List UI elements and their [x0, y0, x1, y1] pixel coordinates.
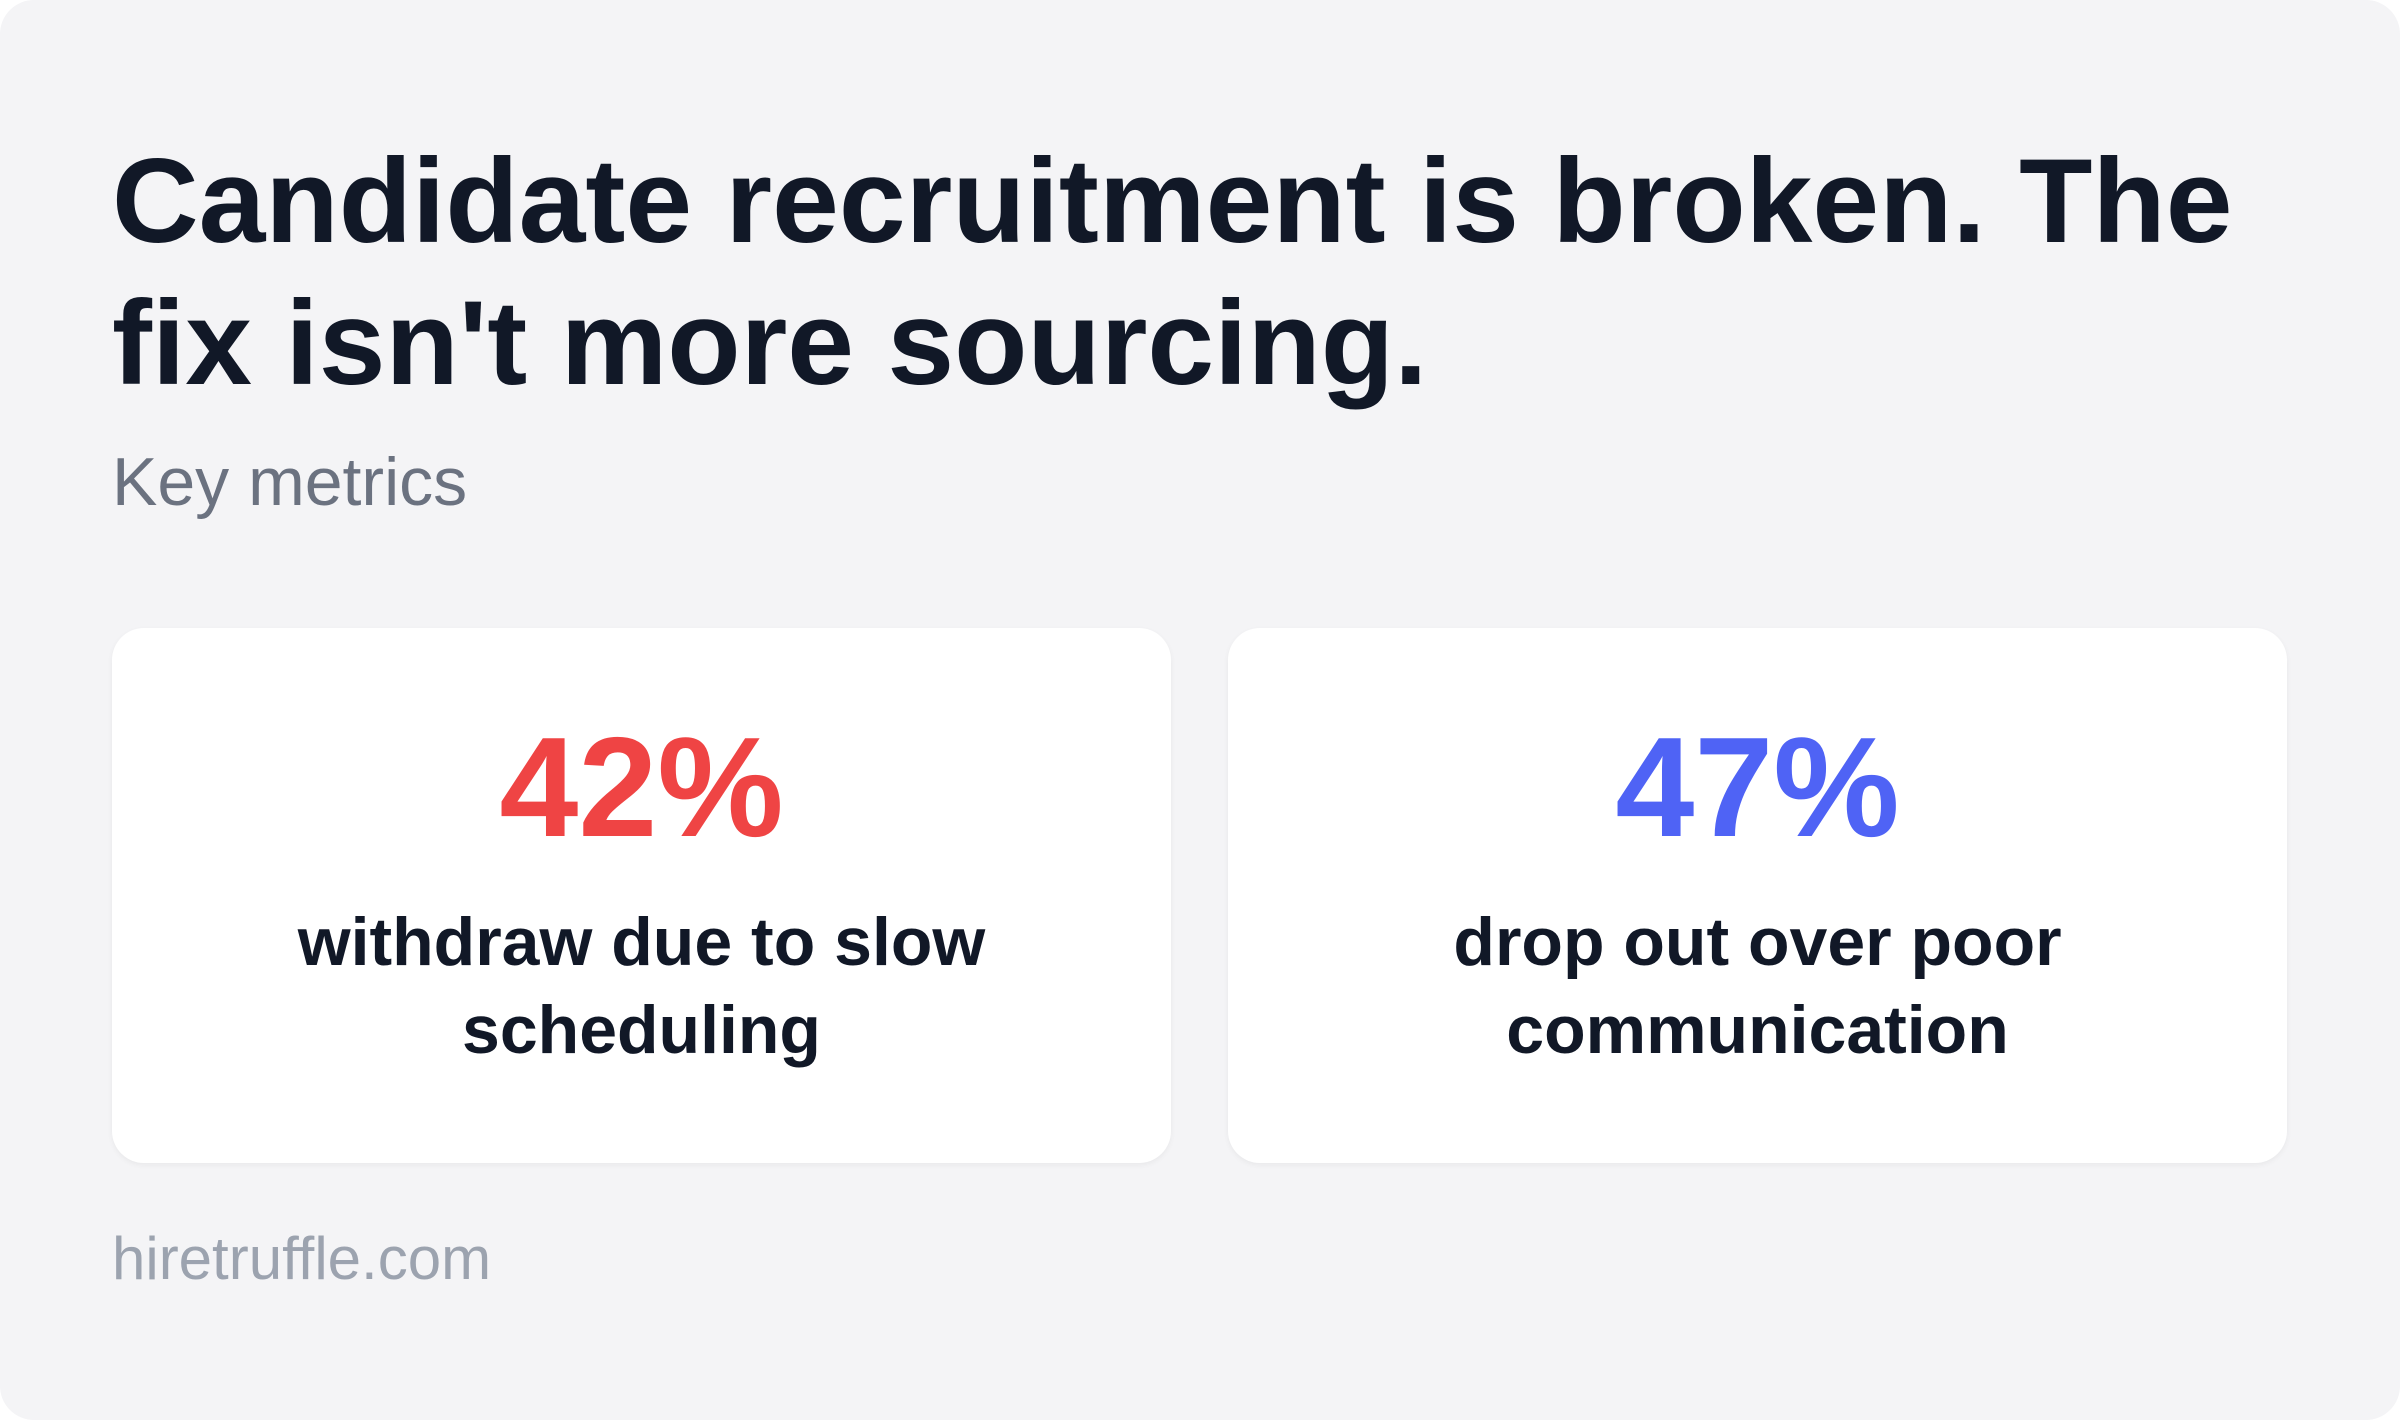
- subtitle: Key metrics: [112, 444, 467, 520]
- stat label: [1453, 904, 2062, 1068]
- footer source: hiretruffle.com: [112, 1225, 491, 1292]
- title: Candidate recruitment is broken. The fix isn't more sourcing.: [112, 134, 2232, 410]
- panel: card 47%: [1228, 628, 2287, 1163]
- panel: card 42%: [112, 628, 1171, 1163]
- stat label: communication: [1506, 992, 2009, 1068]
- stat number 47%: 47%: [1615, 708, 1900, 867]
- stat label: withdraw due to slow: [298, 904, 985, 980]
- stat label: scheduling: [462, 992, 821, 1068]
- stat number 42%: 42%: [499, 708, 784, 867]
- stat label: drop out over poor: [1453, 904, 2062, 980]
- stat label: [298, 904, 986, 1068]
